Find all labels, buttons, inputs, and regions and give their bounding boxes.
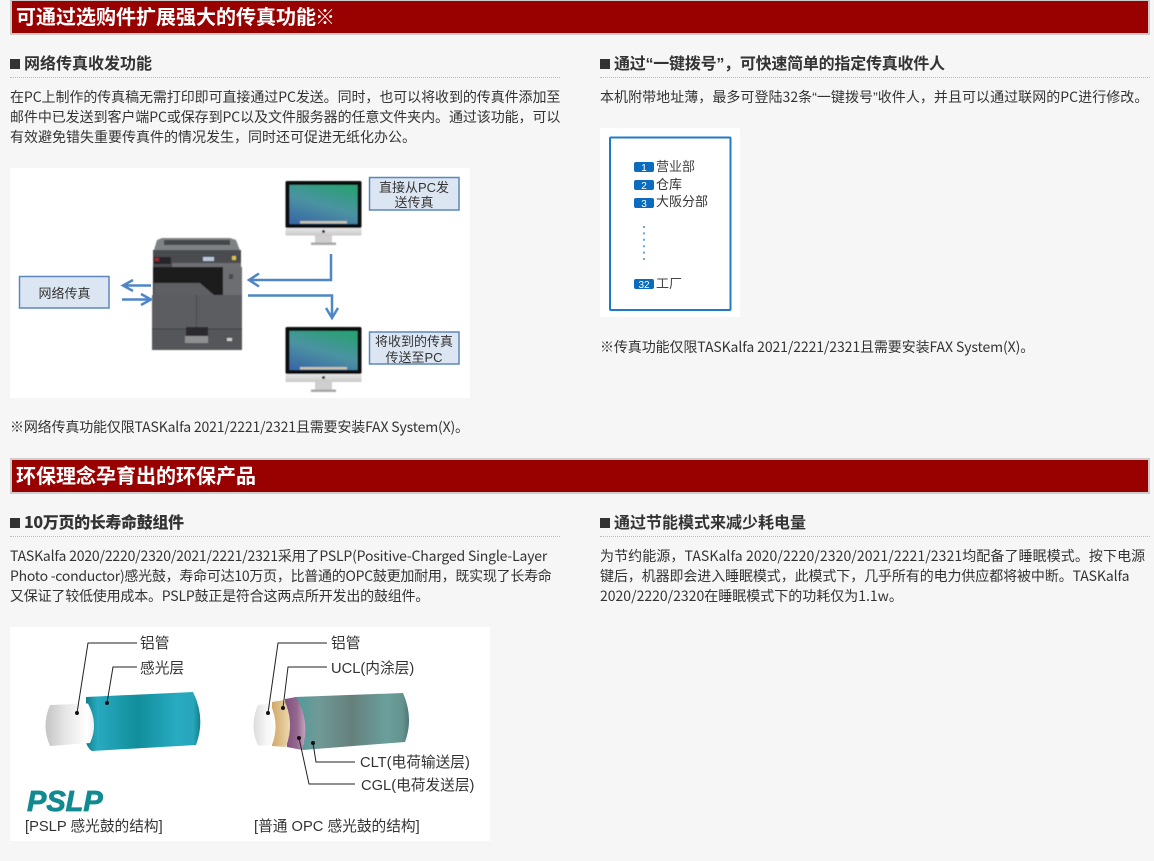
text: drum description: TASKalfa 2020/2220/2320/2021/2221/2321采用了PSLP(Positive-Charged Single-Layer — [10, 546, 547, 566]
leader dots — [75, 701, 315, 745]
text: one-touch description: 本机附带地址薄，最多可登陆32条“一键拨号”收件人，并且可以通过联网的PC进行修改。 — [600, 87, 1148, 107]
drum labels: [PSLP 感光鼓的结构] — [25, 818, 163, 835]
text: power saving description: 键后，机器即会进入睡眠模式，此模式下，几乎所有的电力供应都将被中断。TASKalfa — [600, 566, 1129, 586]
logo: PSLP: PSLP — [27, 786, 103, 818]
label: send from PC: 送传真 — [394, 195, 434, 210]
label: forward to PC: 传送至PC — [385, 350, 443, 365]
text: power saving description — [600, 546, 1145, 606]
section banner: fax: 可通过选购件扩展强大的传真功能※ — [16, 1, 332, 30]
drum labels: 铝管 — [140, 635, 169, 652]
leader lines — [77, 643, 355, 784]
heading: power saving — [600, 510, 1150, 537]
text: network fax description: 邮件中已发送到客户端PC或保存到PC以及文件服务器的任意文件夹内。通过该功能，可以 — [10, 107, 560, 127]
entry 1 — [634, 159, 695, 174]
diagram: network fax flow — [10, 168, 470, 398]
arrow: PC to printer — [249, 254, 331, 286]
drum labels: 感光层 — [140, 660, 184, 677]
drum labels — [25, 635, 474, 835]
heading: network fax — [10, 51, 560, 78]
text: drum description: 又保证了较低使用成本。PSLP鼓正是符合这两点所开发出的鼓组件。 — [10, 586, 429, 606]
arrow: network to printer — [122, 294, 151, 305]
text: network fax description: 在PC上制作的传真稿无需打印即可直接通过PC发送。同时，也可以将收到的传真件添加至 — [10, 87, 560, 107]
entry 32 — [634, 276, 682, 291]
entry 1: 营业部 — [656, 159, 695, 174]
heading: drum — [10, 510, 560, 537]
entry 32: 工厂 — [656, 276, 682, 291]
heading: one-touch dial: 通过“一键拨号”，可快速简单的指定传真收件人 — [614, 50, 945, 74]
text: power saving description: 2020/2220/2320在睡眠模式下的功耗仅为1.1w。 — [600, 586, 903, 606]
icon: monitor bottom — [286, 327, 362, 392]
text: network fax description: 有效避免错失重要传真件的情况发生，同时还可促进无纸化办公。 — [10, 127, 416, 147]
entry 2: 2 — [641, 181, 647, 192]
diagram: address book — [600, 128, 740, 317]
text: power saving description: 为节约能源，TASKalfa 2020/2220/2320/2021/2221/2321均配备了睡眠模式。按下电源 — [600, 546, 1145, 566]
section banner: eco — [10, 458, 1150, 494]
section banner: fax — [10, 0, 1150, 35]
entry 3: 大阪分部 — [656, 194, 708, 209]
section banner: eco: 环保理念孕育出的环保产品 — [16, 460, 256, 489]
heading: one-touch dial — [600, 51, 1150, 78]
drum labels: [普通 OPC 感光鼓的结构] — [254, 818, 420, 835]
label: network fax: 网络传真 — [38, 286, 91, 301]
label: forward to PC: 将收到的传真 — [375, 334, 453, 349]
label: send from PC — [370, 178, 459, 210]
label: forward to PC — [370, 332, 459, 365]
note: network fax: ※网络传真功能仅限TASKalfa 2021/2221/2321且需要安装FAX System(X)。 — [10, 417, 469, 437]
entry 32: 32 — [638, 280, 650, 291]
icon: monitor top — [286, 181, 362, 245]
drum labels: UCL(内涂层) — [331, 660, 414, 677]
text: network fax description — [10, 87, 560, 147]
diagram: drum structure — [10, 627, 490, 841]
text: drum description: Photo -conductor)感光鼓，寿命可达10万页，比普通的OPC鼓更加耐用，既实现了长寿命 — [10, 566, 552, 586]
heading: drum: 10万页的长寿命鼓组件 — [24, 509, 184, 533]
entry 1: 1 — [641, 163, 647, 174]
drum labels: CLT(电荷输送层) — [360, 754, 470, 771]
note: one-touch fax: ※传真功能仅限TASKalfa 2021/2221/2321且需要安装FAX System(X)。 — [600, 337, 1034, 357]
text: drum description — [10, 546, 552, 606]
drum: PSLP — [46, 692, 200, 751]
arrow: printer to network — [123, 280, 151, 291]
heading: network fax: 网络传真收发功能 — [24, 50, 152, 74]
ellipsis dots — [643, 226, 645, 261]
entry 3: 3 — [641, 199, 647, 210]
drum labels: CGL(电荷发送层) — [361, 777, 474, 794]
label: send from PC: 直接从PC发 — [379, 180, 449, 195]
drum: OPC — [254, 693, 409, 750]
label: network fax — [20, 276, 109, 308]
heading: power saving: 通过节能模式来减少耗电量 — [614, 509, 806, 533]
icon: multifunction printer — [152, 238, 242, 350]
entry 2 — [634, 177, 682, 192]
entry 2: 仓库 — [656, 177, 682, 192]
arrow: printer to PC — [248, 296, 338, 318]
entry 3 — [634, 194, 708, 210]
drum labels: 铝管 — [331, 635, 360, 652]
